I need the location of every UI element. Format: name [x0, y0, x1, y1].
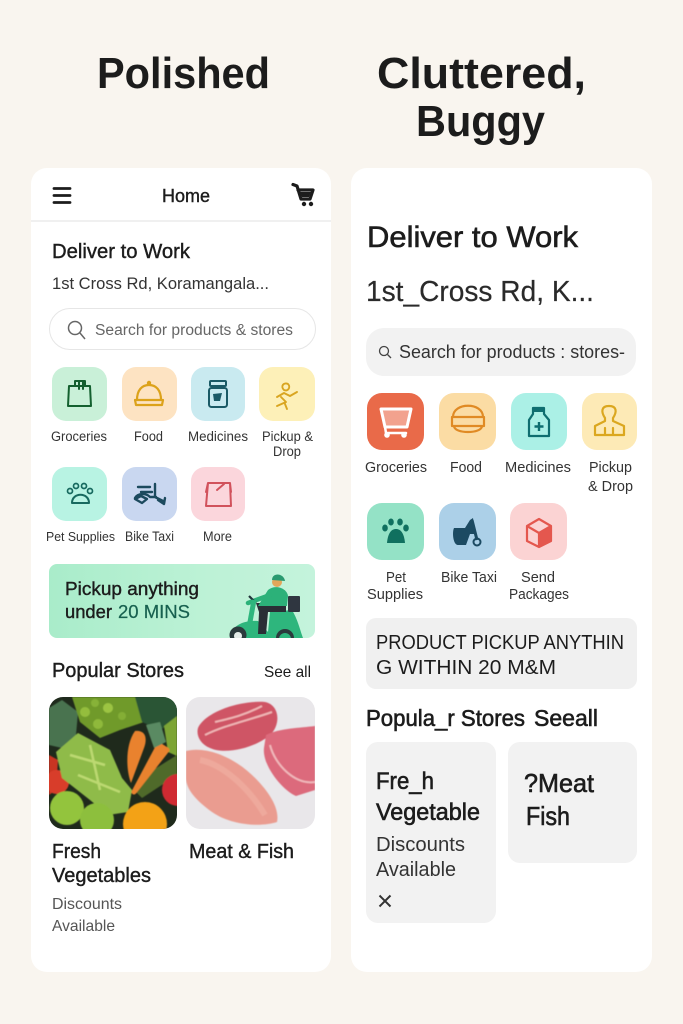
category: Groceries [365, 393, 427, 476]
category: Food: Food [450, 460, 482, 476]
category: Medicines: Medicines [188, 429, 248, 444]
category: Pickup & Drop: & Drop [588, 479, 633, 495]
delivery address: Deliver to Work [367, 221, 579, 254]
promo box: PRODUCT PICKUP ANYTHIN [376, 632, 624, 654]
store card: Meat Fish: ?Meat [524, 768, 595, 798]
category: Food: Food [134, 429, 163, 444]
promo box: G WITHIN 20 M&M [376, 657, 556, 679]
header title: Home [162, 186, 210, 206]
category: Groceries [51, 367, 107, 444]
icon: hamburger menu [54, 188, 70, 202]
heading: Cluttered, Buggy: Buggy [416, 97, 545, 146]
category: Medicines: Medicines [505, 460, 571, 476]
store: Fresh Vegetables [52, 841, 151, 935]
store card: Fresh Vegetable: Discounts [376, 834, 465, 856]
category: Groceries: Groceries [365, 460, 427, 476]
app header [31, 184, 331, 221]
category: Bike Taxi [439, 503, 497, 586]
store card: Fresh Vegetable: Available [376, 859, 456, 881]
category: Pickup & Drop: Drop [273, 444, 301, 459]
category: Bike Taxi [122, 467, 177, 544]
category: Food [439, 393, 496, 476]
see all link: See all [264, 664, 311, 681]
store card: Fresh Vegetable: Vegetable [376, 799, 480, 826]
category: Pet Supplies: Supplies [367, 587, 423, 603]
section heading: Popular Stores, See all: Seeall [534, 705, 598, 731]
category: Pickup & Drop [259, 367, 315, 459]
category: Pet Supplies [46, 467, 115, 544]
photo: meat and fish [186, 697, 315, 829]
store: Fresh Vegetables: Fresh [52, 841, 101, 863]
panel: polished app screen [31, 168, 331, 972]
category: Pet Supplies: Pet Supplies [46, 529, 115, 544]
category: Send Packages [509, 503, 569, 603]
store: Fresh Vegetables: Available [52, 918, 115, 935]
store card: Fresh Vegetable: Fre_h [376, 768, 434, 795]
category: Bike Taxi: Bike Taxi [441, 570, 497, 586]
category: Medicines [188, 367, 248, 444]
promo text [65, 579, 199, 622]
category: More: More [203, 529, 232, 544]
category: Food [122, 367, 177, 444]
icon: cart [293, 184, 313, 206]
category: More [191, 467, 245, 544]
heading: Cluttered, Buggy: Cluttered, [377, 49, 586, 98]
category: Medicines [505, 393, 571, 476]
delivery address [366, 221, 594, 308]
search bar [366, 328, 636, 376]
category: Pet Supplies [367, 503, 424, 603]
store: Meat & Fish: Meat & Fish [189, 841, 294, 863]
delivery address [52, 241, 269, 293]
delivery address: 1st_Cross Rd, K... [366, 276, 594, 308]
promo banner [49, 564, 315, 638]
category: Pickup & Drop: Pickup & [262, 429, 313, 444]
search bar: Search for products : stores- [399, 342, 625, 362]
store: Fresh Vegetables: Discounts [52, 896, 122, 913]
category: Send Packages: Send [521, 570, 555, 586]
search bar: Search for products & stores [95, 322, 293, 339]
promo text: Pickup anything [65, 579, 199, 599]
category: Send Packages: Packages [509, 587, 569, 603]
section heading: Popular Stores: Popular Stores [52, 660, 184, 682]
store card: Meat Fish [508, 742, 637, 863]
section heading: Popular Stores, See all: Popula_r Stores [366, 705, 525, 731]
delivery address: 1st Cross Rd, Koramangala... [52, 274, 269, 293]
icon: close [380, 896, 390, 906]
store card: Fresh Vegetable [366, 742, 496, 923]
category: Groceries: Groceries [51, 429, 107, 444]
category: Pet Supplies: Pet [386, 570, 406, 586]
category: Bike Taxi: Bike Taxi [125, 529, 174, 544]
promo box [366, 618, 637, 689]
promo text: 20 MINS [118, 602, 190, 622]
promo text: under [65, 602, 112, 622]
category: Pickup & Drop [582, 393, 637, 495]
store card: Meat Fish: Fish [526, 801, 570, 831]
search bar [50, 308, 316, 350]
heading: Polished: Polished [97, 49, 270, 98]
panel: cluttered app screen [351, 168, 652, 972]
heading: Cluttered, Buggy [377, 49, 586, 146]
photo: fresh vegetables [49, 697, 177, 829]
section heading: Popular Stores [52, 660, 311, 682]
store: Fresh Vegetables: Vegetables [52, 865, 151, 887]
delivery address: Deliver to Work [52, 241, 191, 263]
icon: delivery rider on scooter [230, 574, 303, 638]
category: Pickup & Drop: Pickup [589, 460, 632, 476]
